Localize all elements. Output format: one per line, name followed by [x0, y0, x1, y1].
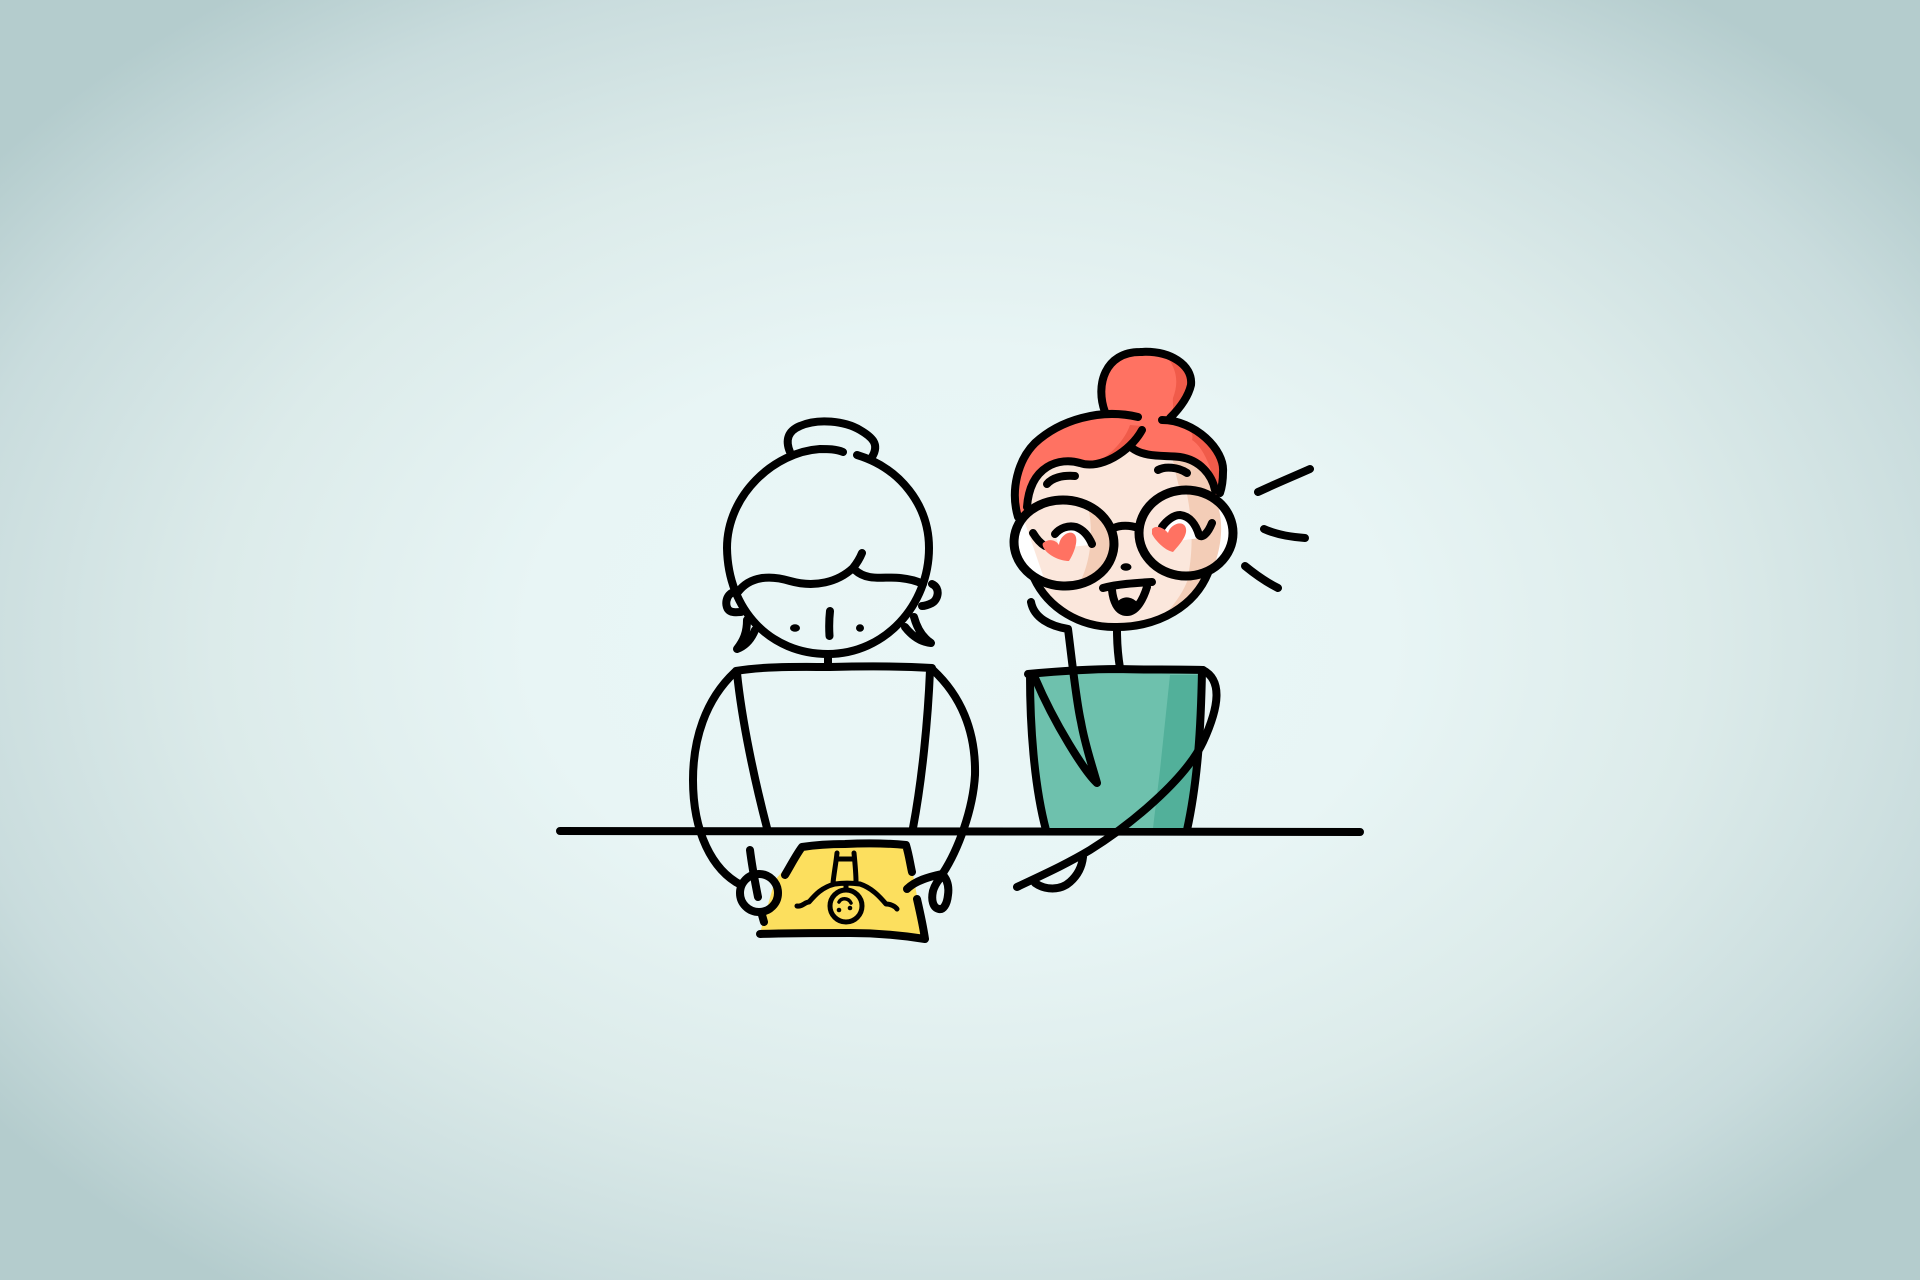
- doodle figure: [797, 853, 897, 922]
- right arm: [1017, 670, 1217, 887]
- right arm: [933, 670, 975, 873]
- character: sketching girl: [693, 421, 975, 939]
- eye whites: [1055, 518, 1200, 548]
- left hand with pen: [740, 850, 778, 922]
- paper with doodle: [760, 843, 925, 939]
- eyes: [1033, 515, 1212, 546]
- right hand: [907, 874, 948, 909]
- excitement marks: [1245, 469, 1310, 588]
- head and hair bun: [727, 421, 929, 654]
- neck: [1117, 630, 1120, 668]
- character: excited girl with glasses: [1010, 352, 1310, 888]
- hair wisps: [737, 617, 931, 649]
- torso: [736, 666, 932, 828]
- table line: [560, 831, 1360, 832]
- glasses frame: [1011, 490, 1233, 589]
- hair and bun fill: [1015, 353, 1223, 520]
- face: [790, 611, 864, 636]
- ears: [726, 584, 938, 612]
- illustration: two friends at a table: [556, 348, 1364, 943]
- hearts: [1043, 523, 1186, 561]
- face outline: [1034, 573, 1208, 627]
- green shirt: [1028, 669, 1203, 830]
- glasses lenses: [1018, 494, 1228, 579]
- eyebrows: [1047, 468, 1187, 484]
- left arm: [693, 672, 741, 885]
- right hand: [1035, 857, 1083, 888]
- fringe: [738, 553, 923, 592]
- neck: [824, 656, 832, 665]
- mouth: [1103, 582, 1152, 612]
- nose: [1120, 563, 1132, 571]
- fringe: [1027, 430, 1215, 507]
- left arm with raised hand: [1031, 602, 1097, 783]
- hair outline: [1015, 352, 1223, 517]
- face fill: [1031, 451, 1212, 623]
